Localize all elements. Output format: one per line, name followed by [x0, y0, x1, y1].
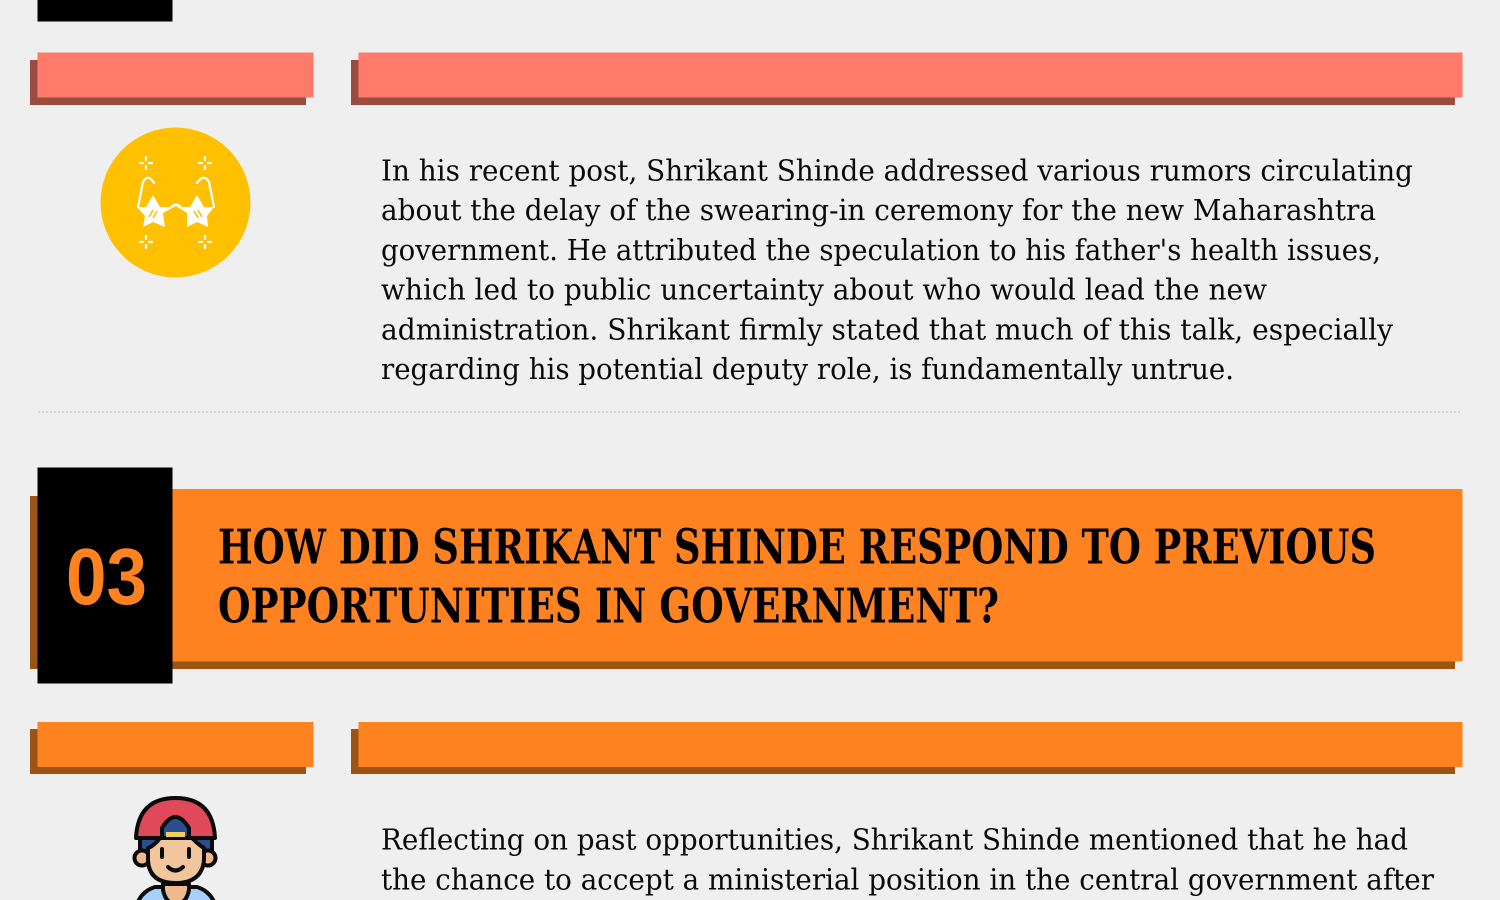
number block: 03 [38, 468, 172, 684]
panel: section 2 right bar [351, 52, 1462, 105]
number block: previous section [38, 0, 172, 22]
heading: section 3 question: OPPORTUNITIES IN GOVERNMENT? [218, 578, 999, 634]
icon: boy with backwards cap [134, 798, 216, 900]
text block: section 2 body: administration. Shrikant firmly stated that much of this talk, especially [381, 312, 1394, 346]
number block: 03: 03 [66, 532, 147, 621]
text block: section 2 body [381, 154, 1413, 386]
icon: star sunglasses [100, 128, 250, 278]
text block: section 2 body: In his recent post, Shrikant Shinde addressed various rumors circulating [381, 154, 1413, 188]
text block: section 3 body [381, 822, 1434, 896]
panel: section 3 right bar [351, 722, 1462, 774]
heading: section 3 question [218, 520, 1376, 634]
text block: section 2 body: regarding his potential deputy role, is fundamentally untrue. [381, 352, 1234, 386]
text block: section 2 body: government. He attributed the speculation to his father's health issues, [381, 233, 1381, 267]
text block: section 2 body: which led to public uncertainty about who would lead the new [381, 272, 1267, 306]
panel: section 3 left bar [30, 722, 314, 774]
text block: section 2 body: about the delay of the swearing-in ceremony for the new Maharashtra [381, 193, 1376, 227]
text block: section 3 body: the chance to accept a ministerial position in the central government after [381, 862, 1434, 896]
panel: section 3 heading banner [30, 468, 1462, 684]
text block: section 3 body: Reflecting on past opportunities, Shrikant Shinde mentioned that he had [381, 822, 1408, 856]
panel: section 2 left bar [30, 52, 314, 105]
